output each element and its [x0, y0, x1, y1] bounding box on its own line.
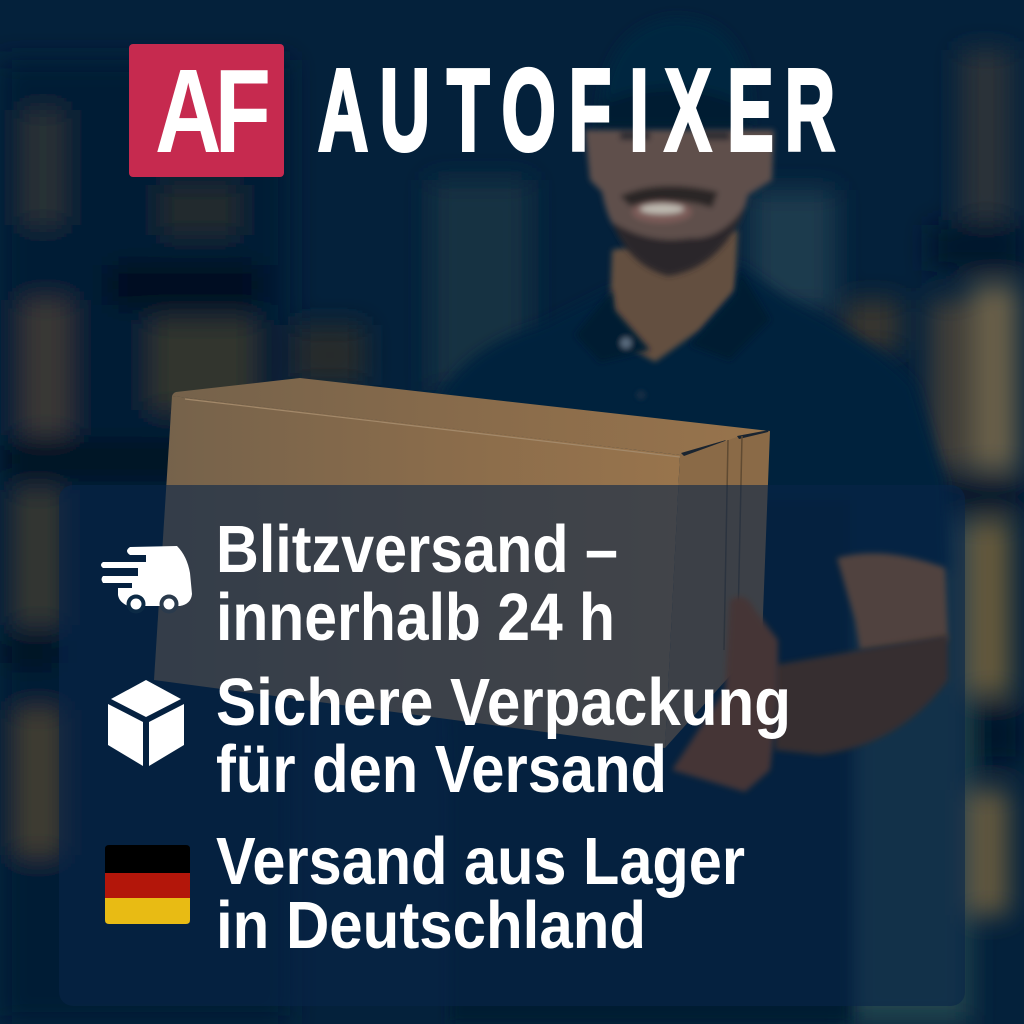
text: Blitzversand: innerhalb 24 h: [216, 580, 615, 655]
feature: fast shipping: [101, 512, 618, 655]
icon: package cube: [108, 680, 184, 766]
text: Blitzversand: [216, 512, 618, 655]
text: Versand aus Lager: in Deutschland: [216, 888, 646, 963]
text: Versand aus Lager: Versand aus Lager: [216, 824, 745, 899]
forearm: [775, 635, 948, 755]
cap: [598, 18, 750, 130]
upper arm: [837, 553, 948, 650]
logo badge: AF: AF: [155, 45, 268, 178]
text: Versand aus Lager: [216, 824, 745, 963]
feature: safe packaging: [108, 665, 791, 807]
shirt: [440, 265, 950, 1024]
cardboard box: [154, 378, 770, 748]
text: Sichere Verpackung: [216, 665, 791, 807]
feature: shipped from Germany: [105, 824, 745, 963]
face: [585, 130, 774, 276]
brand name: AUTOFIXER: [318, 46, 835, 175]
hand over box: [672, 597, 778, 792]
icon: fast delivery truck: [101, 546, 192, 614]
text: Sichere Verpackung: für den Versand: [216, 732, 667, 807]
neck: [610, 230, 738, 362]
panel: features overlay: [59, 485, 965, 1006]
text: Sichere Verpackung: Sichere Verpackung: [216, 665, 791, 740]
icon: German flag: [105, 845, 190, 924]
logo badge: AF: [129, 44, 284, 178]
delivery man: [440, 18, 950, 1024]
shirt collar and buttons: [575, 270, 770, 399]
text: Blitzversand: Blitzversand –: [216, 512, 618, 587]
